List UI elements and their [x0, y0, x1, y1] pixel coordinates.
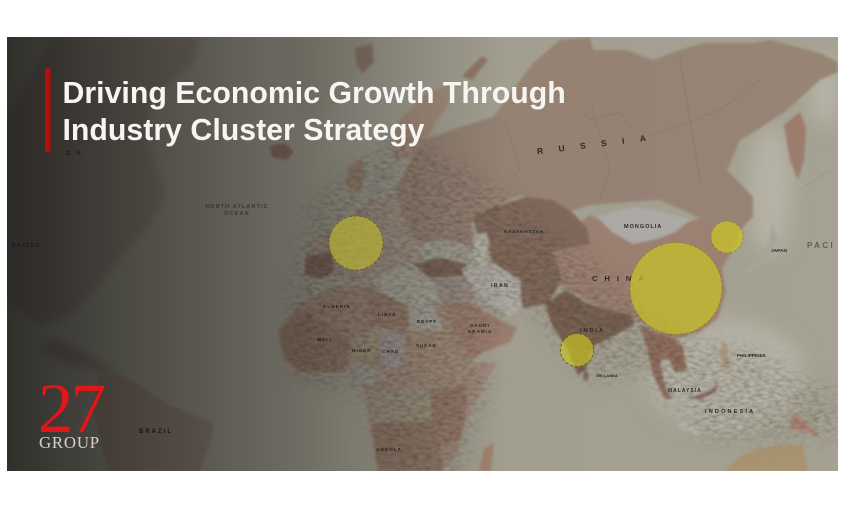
land: Scandinavia: [392, 84, 452, 160]
cluster bubble: Europe: [329, 216, 383, 270]
land: Indonesia islands: [678, 382, 756, 436]
land: Russia: [396, 37, 838, 250]
land: Western and Central Europe: [316, 196, 421, 280]
land: Svalbard: [355, 44, 374, 74]
label: Indonesia: INDONESIA: [705, 409, 755, 415]
title: Industry Cluster Strategy: [62, 114, 425, 147]
map borders and rivers: [405, 60, 838, 440]
label: Algeria: ALGERIA: [323, 304, 351, 309]
land: Madagascar: [479, 442, 494, 471]
label: Saudi Arabia: SAUDI: [470, 323, 490, 329]
cluster bubble: Korea: [711, 221, 743, 253]
label: India: INDIA: [580, 328, 605, 334]
land: Australia: [723, 444, 808, 471]
land: Saudi Arabia: [443, 302, 517, 360]
land: India: [545, 290, 634, 375]
land: Niger: [352, 326, 382, 362]
land: China: [540, 215, 740, 340]
land: Iceland: [270, 143, 294, 160]
land: Mauritania and Mali: [279, 311, 352, 372]
land: East Africa: [430, 384, 466, 444]
title: Driving Economic Growth Through: [62, 77, 566, 110]
label: Mali: MALI: [317, 337, 332, 342]
label: Libya: LIBYA: [378, 312, 396, 317]
label: Chad: CHAD: [382, 349, 399, 354]
label: Canada: DA: [66, 151, 87, 157]
label: North Atlantic Ocean: NORTH ATLANTIC: [205, 204, 269, 210]
land: Guinea coast: [300, 362, 386, 385]
label: Egypt: EGYPT: [417, 319, 437, 324]
logo: 27 Group: GROUP: [39, 433, 100, 452]
land: Caspian Sea: [472, 231, 492, 264]
land: Philippines: [720, 340, 735, 372]
label: United States: STATES: [12, 243, 40, 249]
cluster bubbles: [329, 216, 743, 366]
land: Mongolia: [597, 207, 690, 244]
land: Algeria: [310, 288, 375, 344]
label: Malaysia: MALAYSIA: [668, 388, 702, 394]
pale coastal shallows: [645, 54, 841, 430]
land: Iran: [462, 262, 522, 316]
label: Brazil: BRAZIL: [139, 429, 173, 435]
cluster bubble: India: [560, 334, 594, 366]
label: China: CHINA: [592, 274, 651, 283]
label: Saudi Arabia: ARABIA: [468, 329, 492, 335]
land: Central Africa: [370, 388, 432, 424]
label: Angola: ANGOLA: [376, 447, 402, 452]
label: Niger: NIGER: [352, 348, 372, 353]
land: Japan: [740, 222, 778, 276]
land: Central Asia and Pakistan: [490, 243, 562, 308]
land: Baltic and Scandinavia grey: [368, 110, 440, 192]
land: Malaysia Borneo: [690, 380, 718, 400]
map landmasses: [92, 37, 838, 471]
land: Sudan: [407, 330, 456, 372]
title: [62, 77, 566, 147]
label: North Atlantic Ocean: OCEAN: [224, 211, 250, 217]
land: Canada and United States: [87, 40, 196, 286]
land: Africa north: [277, 284, 497, 471]
land: Great Britain: [346, 158, 365, 192]
label: Kazakhstan: KAZAKHSTAN: [504, 229, 544, 235]
land: Iberia: [304, 252, 334, 279]
land: Chad: [380, 328, 406, 372]
label: Pacific: PACI: [807, 241, 835, 250]
land: Southern Africa: [372, 420, 443, 471]
label: Sri Lanka: SRI LANKA: [596, 373, 618, 378]
label: Japan: JAPAN: [771, 248, 787, 254]
label: Mongolia: MONGOLIA: [624, 224, 662, 230]
label: Russia: RUSSIA: [536, 131, 662, 156]
land: Kamchatka: [784, 112, 806, 180]
land: Southeast Asia: [640, 325, 687, 400]
map country labels: [12, 131, 835, 452]
land: Kazakhstan: [473, 197, 590, 254]
title accent bar: [45, 68, 50, 152]
land: Libya: [365, 290, 407, 328]
cluster bubble: China: [630, 242, 722, 334]
faint western hemisphere land: [56, 40, 196, 368]
land: Novaya Zemlya: [462, 56, 488, 80]
land: Sri Lanka: [583, 371, 589, 381]
land: Egypt: [410, 303, 443, 330]
land: South America: [92, 372, 214, 471]
logo: 27 Group: 27: [38, 370, 104, 448]
land: Iraq and Levant: [432, 278, 476, 302]
land: Central America: [40, 340, 125, 378]
land: Mediterranean and Gulf pale area: [370, 279, 376, 282]
land: Greenland: [642, 320, 643, 321]
label: Philippines: PHILIPPINES: [737, 353, 766, 358]
label: Sudan: SUDAN: [416, 343, 437, 348]
land: Turkey: [413, 258, 467, 278]
land: Black Sea: [419, 240, 439, 256]
land: Papua New Guinea: [790, 414, 820, 438]
label: Iran: IRAN: [491, 283, 509, 289]
